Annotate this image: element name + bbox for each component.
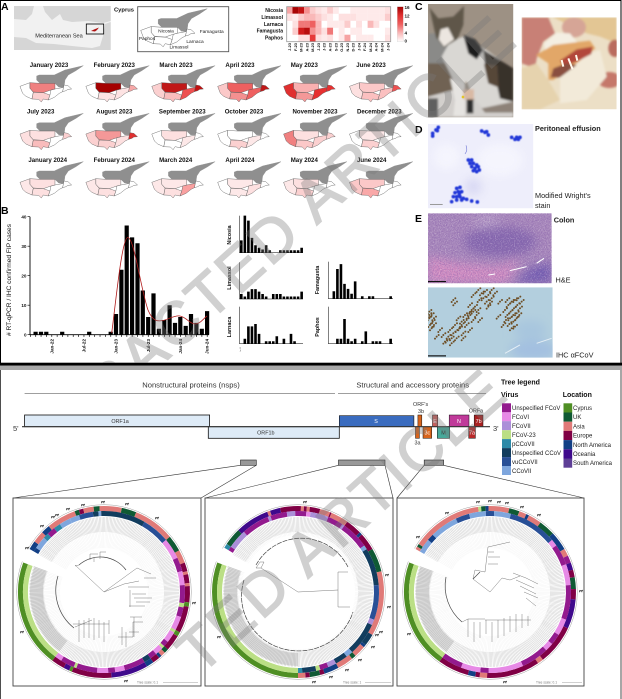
panel: phylogenetic tree 2	[180, 474, 416, 699]
heat map of cases by district: N-23	[345, 42, 350, 51]
heat map of cases by district: M-23	[310, 42, 315, 52]
map August 2023: August 2023	[96, 109, 133, 116]
location ring	[372, 474, 608, 699]
map May 2024	[284, 157, 347, 198]
heat map of cases by district: M-23	[299, 42, 304, 52]
caption: H and E: H&E	[556, 276, 571, 284]
map February 2024	[86, 157, 149, 198]
small bar chart Paphos: Paphos	[315, 317, 321, 337]
heat map of cases by district: D-23	[351, 42, 356, 51]
heat map of cases by district: Limassol	[261, 15, 284, 21]
map October 2023: October 2023	[225, 109, 264, 116]
heat map of cases by district: J-23	[287, 42, 292, 51]
caption: Colon: Colon	[554, 216, 574, 224]
tree scale 1	[137, 680, 198, 684]
heat map of cases by district: Paphos	[265, 36, 283, 42]
map September 2023	[152, 109, 215, 150]
genome region marker 3 with zoom lines	[397, 460, 584, 498]
location legend: Asia	[573, 424, 585, 430]
tree branches	[242, 538, 353, 651]
map June 2024: June 2024	[357, 157, 387, 164]
map April 2024	[218, 157, 281, 198]
tree branches	[56, 552, 156, 647]
Cyprus district map: Larnaca	[186, 39, 204, 45]
tree scale 3: Tree scale: 0.1	[536, 680, 557, 684]
location legend: North America	[573, 443, 612, 449]
main bar chart of confirmed FIP cases: # RT-qPCR / IHC confirmed FIP cases	[6, 224, 13, 336]
map May 2023: May 2023	[291, 62, 318, 69]
ORF 3c: 3c	[425, 431, 431, 437]
S gene	[339, 416, 414, 427]
location legend	[563, 392, 613, 468]
Cyprus district map: Limassol	[170, 45, 188, 51]
ORF labels: 3a	[414, 440, 420, 446]
location legend: Cyprus	[573, 406, 592, 412]
ORF1a gene: ORF1a	[111, 419, 129, 425]
genome region marker 1 with zoom lines	[13, 460, 256, 498]
ORF1a gene	[25, 415, 210, 427]
main bar chart of confirmed FIP cases	[6, 214, 210, 354]
main bar chart of confirmed FIP cases: Jan-23	[114, 339, 119, 354]
ORF 3b	[418, 415, 422, 427]
ORF 3a	[416, 427, 419, 438]
N gene: N	[457, 419, 461, 425]
main bar chart of confirmed FIP cases: Jan-22	[49, 339, 54, 354]
heat map of cases by district: Larnaca	[264, 22, 283, 28]
virus legend: FCoVII	[512, 424, 531, 430]
watermark: lower: TED ARTICLE	[164, 356, 520, 686]
virus legend: Unspecified CCoV	[512, 451, 561, 457]
ORF1b gene	[208, 427, 339, 438]
virus legend: Virus	[501, 392, 518, 399]
E gene: E	[433, 419, 437, 425]
N gene	[449, 415, 469, 427]
map May 2023	[284, 62, 347, 102]
main bar chart of confirmed FIP cases: 20	[21, 273, 27, 278]
pet icons tree 1	[20, 501, 196, 682]
label 3 prime: 3'	[493, 424, 499, 433]
section heading: nonstructural proteins: Nonstructural proteins (nsps)	[142, 380, 240, 390]
virus legend	[501, 392, 561, 475]
main bar chart of confirmed FIP cases: 10	[21, 303, 27, 308]
map January 2023: January 2023	[30, 62, 69, 69]
lower figure frame	[0, 370, 621, 699]
heat map of cases by district: Famagusta	[257, 29, 283, 35]
genome diagram	[13, 380, 584, 498]
small bar chart Limassol: Limassol	[227, 266, 233, 290]
monthly maps 2023 to 2024	[20, 62, 413, 198]
panel: phylogenetic tree 3	[372, 474, 608, 699]
ORF 7a: 7a	[469, 431, 475, 437]
genome region marker 2 with zoom lines	[205, 460, 393, 498]
map February 2023: February 2023	[94, 62, 136, 69]
location legend: South America	[573, 461, 613, 467]
main bar chart of confirmed FIP cases: 30	[21, 244, 27, 249]
map April 2024: April 2024	[225, 157, 255, 164]
tree legend	[501, 380, 613, 475]
location legend: UK	[573, 415, 581, 421]
panel letter B: B	[1, 205, 9, 217]
ORF labels	[413, 402, 483, 446]
map October 2023	[218, 109, 281, 150]
heat map of cases by district: F-23	[293, 42, 298, 51]
heat map of cases by district: F-24	[362, 42, 367, 51]
micrograph: IHC colon	[428, 287, 557, 360]
map January 2024	[20, 157, 83, 198]
map November 2023: November 2023	[292, 109, 338, 116]
panel letter D: D	[415, 124, 423, 136]
heat map of cases by district: J-24	[385, 42, 390, 51]
small bar chart Paphos	[315, 307, 393, 344]
main bar chart of confirmed FIP cases: Jul-23	[146, 339, 151, 352]
main bar chart of confirmed FIP cases: Jul-22	[81, 339, 86, 352]
small bar chart Limassol	[227, 262, 303, 299]
map September 2023: September 2023	[159, 109, 206, 116]
map March 2023: March 2023	[159, 62, 193, 69]
ORF 3c	[423, 427, 432, 438]
ORF 7b: 7b	[476, 419, 482, 425]
genome backbone	[22, 426, 490, 428]
E gene	[432, 415, 438, 427]
heat map of cases by district: S-23	[333, 42, 338, 51]
dense label band for Cyprus sequences	[231, 525, 365, 659]
map January 2023	[20, 62, 83, 102]
map November 2023	[284, 109, 347, 150]
pet icons tree 2	[217, 501, 391, 683]
heat map of cases by district	[257, 7, 391, 52]
small bar chart Larnaca: Larnaca	[227, 316, 233, 337]
map March 2024: March 2024	[159, 157, 193, 164]
map June 2023	[349, 62, 413, 102]
Cyprus district map: Famagusta	[200, 29, 224, 35]
location map: Mediterranean: Mediterranean Sea	[35, 34, 84, 40]
map March 2024	[152, 157, 215, 198]
small bar chart Famagusta	[315, 262, 393, 299]
location legend: Oceania	[573, 452, 596, 458]
heat map of cases by district: J-23	[322, 42, 327, 51]
main bar chart of confirmed FIP cases: 40	[21, 214, 27, 219]
location legend: Europe	[573, 434, 593, 440]
divider band between sections	[0, 363, 622, 370]
label Cyprus: Cyprus	[114, 8, 134, 14]
heat map of cases by district: J-24	[356, 42, 361, 51]
panel D: cytology	[415, 124, 601, 210]
main bar chart of confirmed FIP cases: Jun-24	[205, 339, 210, 354]
heat map colour scale	[397, 5, 410, 44]
virus legend: FCoVI	[512, 415, 529, 421]
heat map of cases by district: A-24	[374, 42, 379, 51]
M gene	[437, 427, 450, 438]
map December 2023: December 2023	[357, 109, 402, 116]
panel A: geographic distribution	[1, 1, 413, 198]
main bar chart of confirmed FIP cases: Jan-24	[178, 339, 183, 354]
map January 2024: January 2024	[28, 157, 68, 164]
map August 2023	[86, 109, 149, 150]
panel letter C: C	[415, 1, 423, 13]
tree scale 1: Tree scale: 0.1	[137, 680, 158, 684]
upper figure frame	[0, 0, 621, 365]
caption: stain: Modified Wright's	[535, 191, 591, 200]
location ring	[180, 474, 416, 699]
small bar chart Nicosia	[227, 216, 303, 253]
panel C: clinical photographs	[415, 1, 622, 117]
small bar chart Nicosia: Nicosia	[227, 224, 233, 245]
virus legend: FCoV-23	[512, 433, 536, 439]
map April 2023: April 2023	[225, 62, 255, 69]
label 5 prime: 5'	[13, 424, 19, 433]
tree branches	[445, 542, 538, 642]
Cyprus district map: Nicosia	[158, 28, 174, 34]
small bar chart Famagusta: Famagusta	[315, 265, 321, 294]
heat map colour scale: 8	[404, 22, 408, 27]
heat map colour scale: 12	[404, 14, 410, 18]
caption: Peritoneal effusion: Peritoneal effusion	[535, 124, 601, 133]
small bar chart Larnaca	[227, 307, 303, 352]
ORF1b gene: ORF1b	[257, 430, 274, 436]
location map: Mediterranean	[14, 6, 111, 50]
panel: phylogenetic tree 1	[0, 474, 222, 699]
ORF labels: 3b	[418, 409, 424, 415]
micrograph: H and E colon	[428, 213, 552, 283]
panel letter E: E	[415, 213, 422, 225]
location ring	[0, 474, 222, 699]
panel letter A: A	[1, 1, 9, 13]
heat map of cases by district: O-23	[339, 42, 344, 52]
heat map of cases by district: A-23	[328, 42, 333, 51]
virus legend: pCCoVII	[512, 442, 535, 448]
section heading: structural and accessory proteins: Structural and accessory proteins	[356, 380, 469, 390]
photo: cat with effusion	[428, 4, 513, 117]
virus ring	[0, 481, 215, 699]
small bar chart Larnaca: Jan-23	[240, 347, 242, 352]
map March 2023	[152, 62, 215, 102]
heat map of cases by district: Nicosia	[265, 8, 283, 14]
ORF 7b	[474, 415, 483, 427]
dense label band for Cyprus sequences	[9, 497, 199, 687]
heat map of cases by district: A-23	[304, 42, 309, 51]
M gene: M	[441, 431, 446, 437]
Cyprus district map	[138, 7, 229, 52]
map February 2023	[86, 62, 149, 102]
ORF labels: ORF's	[413, 402, 428, 408]
dense label band for Cyprus sequences	[396, 498, 584, 686]
tree scale 2	[343, 680, 391, 684]
photo: oral lesion	[522, 17, 622, 109]
heat map colour scale: 4	[404, 30, 408, 36]
panel E: colon histology	[415, 213, 594, 360]
S gene: S	[374, 419, 378, 425]
Cyprus district map: Paphos	[139, 36, 156, 42]
map June 2024	[349, 157, 413, 198]
tree scale 3	[536, 680, 582, 684]
virus ring	[187, 481, 409, 699]
map June 2023: June 2023	[356, 62, 386, 69]
tree scale 2: Tree scale: 1	[343, 680, 362, 684]
virus legend: CCoVII	[512, 469, 532, 475]
map July 2023: July 2023	[27, 109, 55, 116]
virus legend: vuCCoVII	[512, 460, 538, 466]
map December 2023	[349, 109, 413, 150]
heat map of cases by district: M-24	[368, 42, 373, 52]
caption: IHC alpha FCoV: IHC αFCoV	[556, 350, 594, 360]
heat map colour scale: 0	[404, 38, 408, 44]
panel B: case counts over time	[1, 205, 393, 354]
virus legend: Unspecified FCoV	[512, 406, 560, 412]
heat map of cases by district: J-23	[316, 42, 321, 51]
map February 2024: February 2024	[94, 157, 136, 164]
map April 2023	[218, 62, 281, 102]
heat map of cases by district: M-24	[380, 42, 385, 52]
micrograph: peritoneal effusion smear	[428, 124, 533, 208]
ORF 7a	[469, 427, 475, 438]
map May 2024: May 2024	[291, 157, 318, 164]
caption: stain: stain	[535, 201, 550, 210]
legend title: Tree legend	[501, 380, 540, 386]
pet icons tree 3	[407, 500, 583, 683]
map July 2023	[20, 109, 83, 150]
virus ring	[379, 481, 601, 699]
location legend: Location	[563, 392, 592, 399]
heat map colour scale: 16	[404, 5, 410, 10]
main bar chart of confirmed FIP cases: 0	[24, 332, 27, 337]
ORF labels: ORFa	[469, 408, 483, 414]
